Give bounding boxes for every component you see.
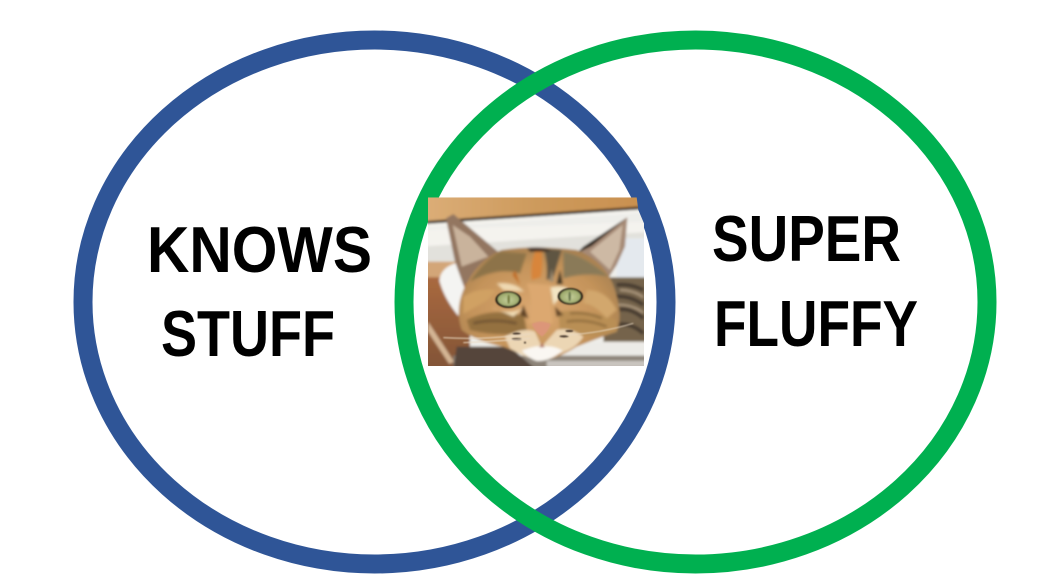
label: knows stuff: [147, 213, 372, 370]
circle: knows stuff: [83, 40, 666, 564]
circle: super fluffy: [404, 40, 987, 564]
whisker marks: [512, 330, 573, 344]
whiskers: [443, 323, 633, 343]
eyes: [495, 288, 583, 308]
label: knows stuff: STUFF: [161, 297, 335, 370]
label: super fluffy: FLUFFY: [714, 287, 918, 360]
muzzle: [505, 329, 583, 360]
background: [428, 210, 644, 358]
nose: [532, 322, 551, 337]
ears: [446, 214, 500, 285]
head markings: [463, 248, 617, 335]
label: super fluffy: [712, 202, 918, 360]
label: knows stuff: KNOWS: [147, 213, 372, 286]
photo: tabby cat: [428, 197, 644, 366]
head: [459, 247, 620, 360]
label: super fluffy: SUPER: [712, 202, 901, 275]
